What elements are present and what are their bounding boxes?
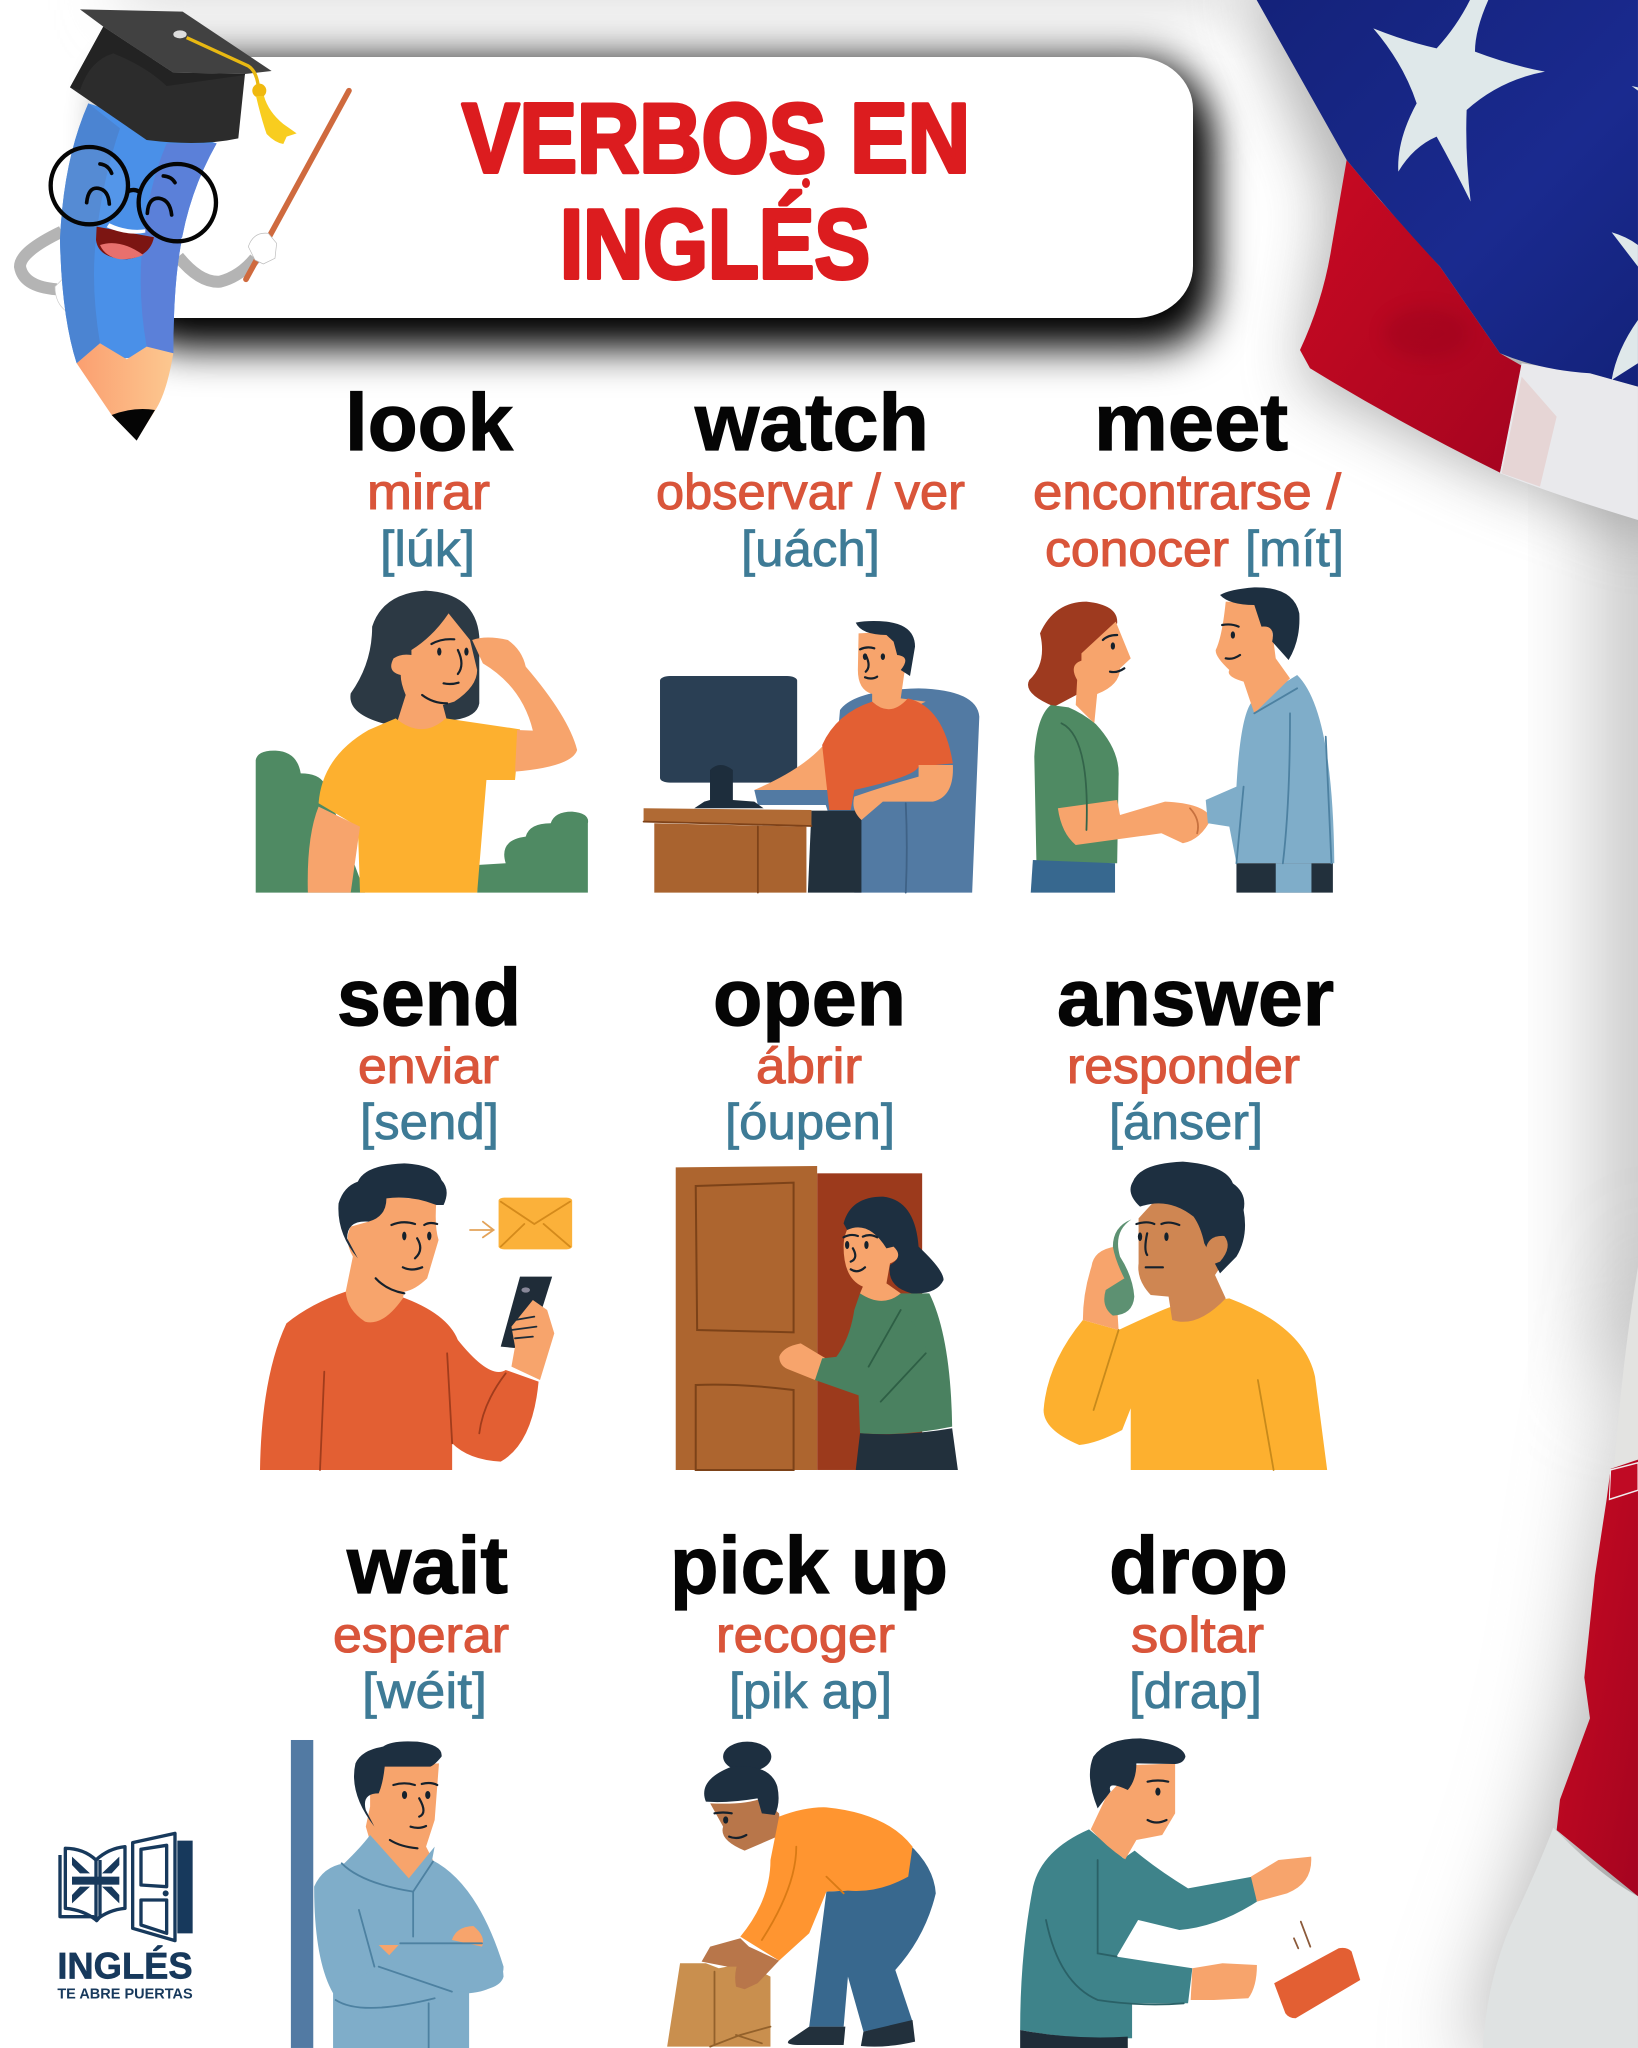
panel: pick up — [667, 1521, 948, 2047]
panel: answer — [1044, 953, 1334, 1470]
glasses and face — [51, 147, 217, 259]
icon: flag star — [1373, 0, 1545, 202]
banner shadow — [110, 57, 1210, 347]
pointer stick — [246, 91, 349, 279]
illustration: man sending a message — [260, 1163, 572, 1470]
illustration: woman opening a door — [676, 1166, 958, 1470]
pencil tip — [77, 343, 173, 440]
translation: responder — [1067, 1038, 1300, 1094]
illustration: man answering the phone — [1044, 1162, 1327, 1470]
pronunciation: [ánser] — [1109, 1094, 1263, 1150]
title: INGLÉS — [560, 189, 870, 299]
word: look — [345, 378, 514, 468]
arms — [20, 232, 255, 312]
illustration: woman looking — [256, 591, 588, 893]
pronunciation: [wéit] — [362, 1663, 487, 1719]
pencil body — [60, 103, 217, 363]
illustration: man watching a screen — [644, 621, 979, 893]
hand — [248, 233, 277, 264]
translation: enviar — [358, 1038, 499, 1094]
panel: wait — [291, 1521, 509, 2048]
logo: TE ABRE PUERTAS — [57, 1986, 193, 2002]
translation: esperar — [333, 1607, 509, 1663]
word: watch — [694, 378, 929, 468]
word: meet — [1094, 378, 1288, 468]
translation: ábrir — [756, 1038, 862, 1094]
pronunciation: [send] — [360, 1094, 499, 1150]
flag: bottom right — [1483, 1265, 1638, 2048]
graduation cap — [70, 9, 297, 144]
translation: soltar — [1131, 1607, 1264, 1663]
word: open — [713, 953, 906, 1043]
flag: top right — [1257, 0, 1638, 520]
word: drop — [1109, 1521, 1288, 1611]
word: send — [337, 953, 521, 1043]
pronunciation: [drap] — [1129, 1663, 1262, 1719]
translation: encontrarse / — [1033, 464, 1341, 520]
pencil mascot — [20, 9, 349, 441]
panel: send — [260, 953, 572, 1470]
icon: book and door — [60, 1833, 175, 1941]
panel: meet — [1028, 378, 1344, 893]
translation: mirar — [367, 464, 490, 520]
panel: open — [676, 953, 958, 1470]
panel: watch — [644, 378, 979, 893]
panel: look — [256, 378, 588, 893]
logo — [57, 1833, 193, 2002]
word: answer — [1057, 953, 1334, 1043]
pronunciation: [óupen] — [725, 1094, 895, 1150]
illustration: woman picking up a bag — [667, 1742, 936, 2047]
illustration: man waiting by a wall — [291, 1740, 504, 2048]
word: wait — [346, 1521, 508, 1611]
pronunciation: [pik ap] — [729, 1663, 892, 1719]
title: VERBOS EN — [462, 83, 970, 193]
pronunciation: [lúk] — [380, 521, 475, 577]
panel: meet: conocer — [1045, 521, 1229, 577]
pronunciation: [uách] — [741, 521, 880, 577]
translation: recoger — [716, 1607, 895, 1663]
translation: observar / ver — [656, 464, 965, 520]
illustration: two people shaking hands — [1028, 587, 1334, 893]
pronunciation: [mít] — [1245, 521, 1344, 577]
word: pick up — [670, 1521, 948, 1611]
title banner — [110, 57, 1193, 318]
panel: drop — [1020, 1521, 1360, 2048]
wordmark: INGLÉS — [57, 1944, 193, 1986]
title — [462, 83, 970, 299]
illustration: man dropping an object — [1020, 1738, 1360, 2048]
